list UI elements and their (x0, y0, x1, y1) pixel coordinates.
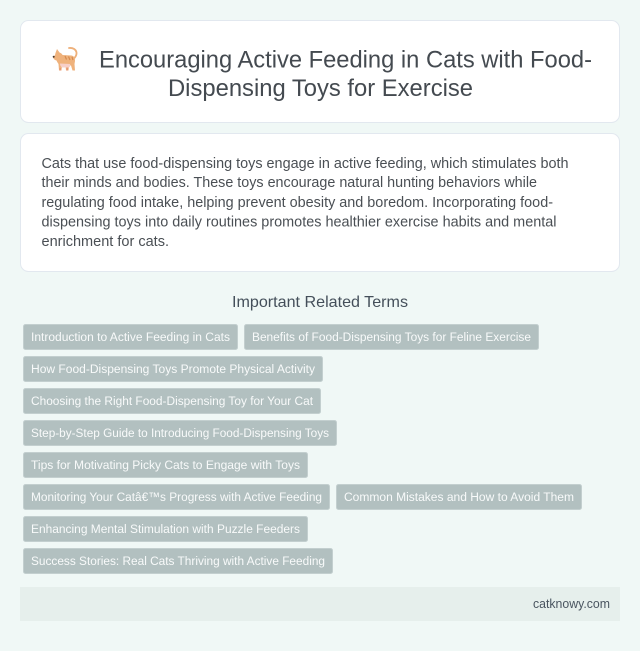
tag: success stories (24, 548, 332, 574)
tag: step-by-step: Step-by-Step Guide to Introducing Food-Dispensing Toys (31, 426, 329, 440)
tag: step-by-step (24, 420, 336, 446)
heading: title: Dispensing Toys for Exercise (168, 75, 473, 102)
footer bar (20, 587, 620, 621)
tag list (24, 324, 582, 574)
text block: intro paragraph: dispensing toys into daily routines promotes healthier exercise habits and mental (42, 214, 556, 230)
tag: mental stimulation (24, 516, 308, 542)
tag: success stories: Success Stories: Real Cats Thriving with Active Feeding (31, 554, 325, 568)
heading: important related terms: Important Related Terms (232, 294, 408, 311)
tag: common mistakes (336, 484, 582, 510)
text block: intro paragraph: regulating food intake, helping prevent obesity and boredom. Incorporating food- (42, 195, 553, 211)
footer bar: catknowy.com (533, 597, 610, 611)
tag: choosing toy: Choosing the Right Food-Dispensing Toy for Your Cat (31, 394, 314, 408)
icon: cat (53, 48, 77, 70)
tag: monitoring: Monitoring Your Catâ€™s Progress with Active Feeding (31, 490, 322, 504)
text block: intro paragraph: their minds and bodies. These toys encourage natural hunting behaviors while (42, 175, 537, 191)
tag: physical activity (24, 356, 322, 382)
text block: intro paragraph (42, 156, 568, 250)
text block: intro paragraph: enrichment for cats. (42, 234, 169, 250)
tag: monitoring (24, 484, 330, 510)
tag: picky cats: Tips for Motivating Picky Cats to Engage with Toys (31, 458, 300, 472)
heading: title: Encouraging Active Feeding in Cats with Food- (99, 46, 592, 74)
tag: choosing toy (24, 388, 320, 414)
tag: introduction: Introduction to Active Feeding in Cats (31, 330, 230, 344)
panel: title card (20, 20, 620, 122)
tag: physical activity: How Food-Dispensing Toys Promote Physical Activity (31, 362, 316, 376)
tag: picky cats (24, 452, 308, 478)
tag: benefits (244, 324, 538, 350)
tag: mental stimulation: Enhancing Mental Stimulation with Puzzle Feeders (31, 522, 300, 536)
tag: benefits: Benefits of Food-Dispensing Toys for Feline Exercise (252, 330, 531, 344)
heading: title (99, 46, 592, 102)
tag: common mistakes: Common Mistakes and How to Avoid Them (344, 490, 574, 504)
tag: introduction (24, 324, 238, 350)
text block: intro paragraph: Cats that use food-dispensing toys engage in active feeding, which stimulates both (42, 156, 568, 172)
panel: intro text card (20, 134, 620, 272)
